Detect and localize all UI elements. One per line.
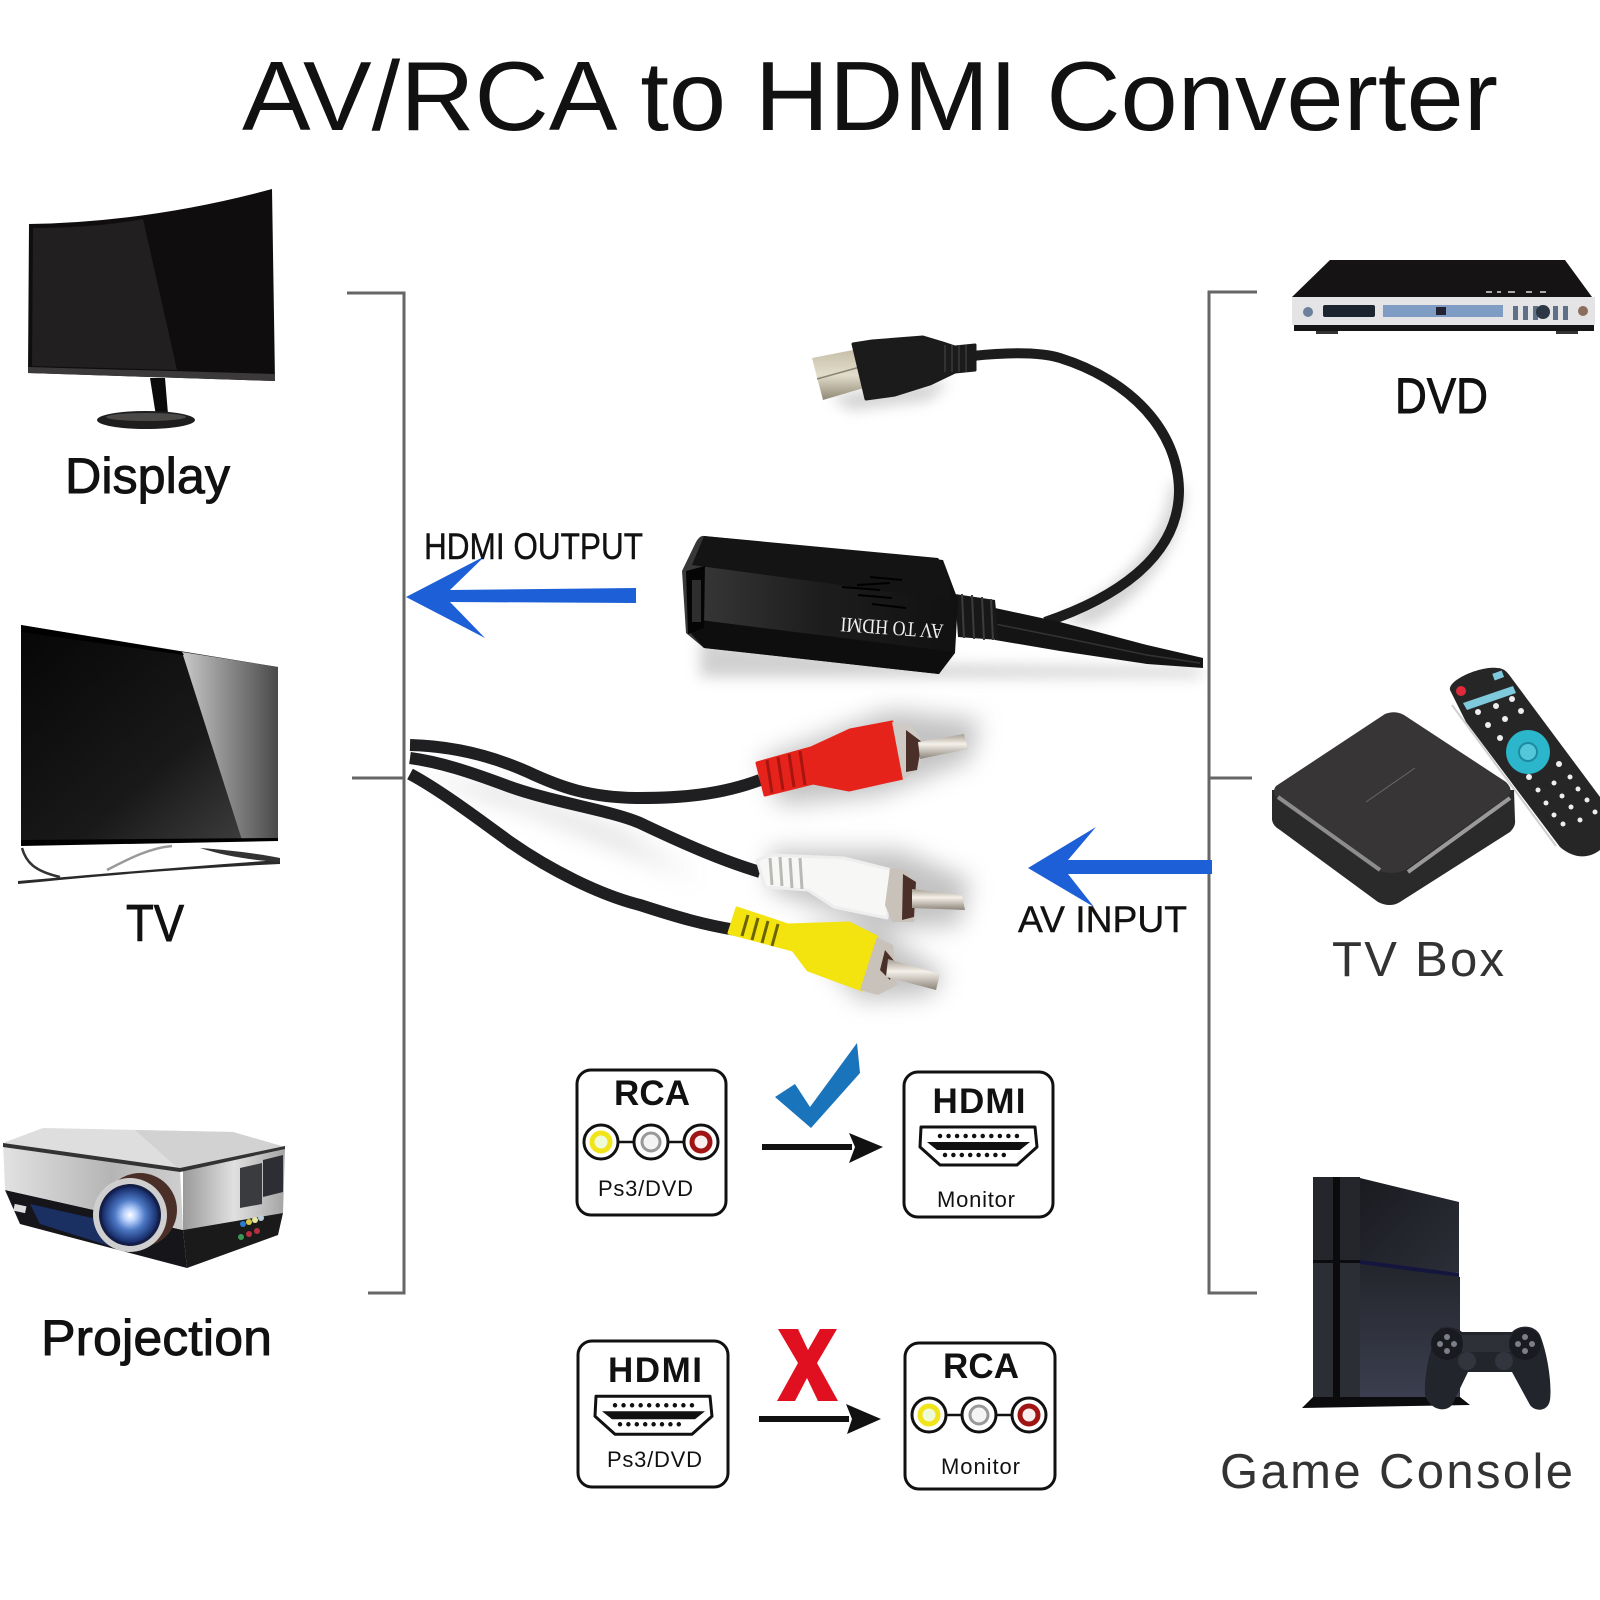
adapter printed label: AV TO HDMI bbox=[840, 612, 944, 644]
RCA monitor box: RCA bbox=[943, 1347, 1019, 1386]
RCA box: Ps3/DVD bbox=[598, 1176, 693, 1201]
box top bbox=[1274, 712, 1511, 873]
arrow: unsupported direction bbox=[759, 1404, 881, 1434]
red plug bbox=[757, 722, 968, 795]
icon: red X bbox=[777, 1329, 838, 1401]
adapter body bbox=[682, 536, 958, 674]
white plug bbox=[757, 855, 965, 922]
label: Projection: Projection bbox=[41, 1310, 272, 1366]
label: TV Box: TV Box bbox=[1332, 933, 1504, 987]
icon: TV box with remote bbox=[1272, 668, 1600, 905]
panel: RCA source to HDMI monitor (supported) bbox=[577, 1043, 1053, 1217]
remote control bbox=[1450, 668, 1600, 856]
USB cable bbox=[972, 353, 1179, 622]
yellow plug bbox=[729, 908, 940, 995]
HDMI monitor box: HDMI bbox=[932, 1082, 1026, 1121]
RCA cables and plugs bbox=[410, 710, 980, 1000]
flat cables bbox=[995, 608, 1203, 668]
RCA box bbox=[577, 1070, 726, 1215]
panel: HDMI source to RCA monitor (not supported) bbox=[578, 1329, 1055, 1489]
cables bbox=[410, 745, 760, 798]
RCA monitor box bbox=[905, 1343, 1055, 1489]
icon: flat TV bbox=[18, 625, 280, 884]
right bracket bbox=[1209, 292, 1257, 1293]
title: AV/RCA to HDMI Converter bbox=[242, 41, 1498, 151]
arrow: supported direction bbox=[762, 1133, 883, 1163]
label: Display: Display bbox=[65, 448, 230, 504]
HDMI monitor box: Monitor bbox=[937, 1187, 1015, 1212]
icon: projector bbox=[3, 1128, 285, 1268]
label: TV: TV bbox=[126, 895, 184, 953]
arrow: AV input bbox=[1028, 827, 1212, 907]
HDMI monitor box bbox=[904, 1072, 1053, 1217]
HDMI box: Ps3/DVD bbox=[607, 1447, 702, 1472]
box side bbox=[1272, 790, 1515, 905]
shadow under adapter bbox=[700, 380, 1200, 677]
converter adapter with USB cable bbox=[682, 337, 1203, 677]
USB body bbox=[853, 337, 975, 399]
label: Game Console: Game Console bbox=[1220, 1445, 1573, 1499]
label: HDMI OUTPUT: HDMI OUTPUT bbox=[424, 526, 643, 567]
label: DVD: DVD bbox=[1395, 368, 1488, 424]
console bbox=[1302, 1177, 1470, 1408]
left bracket bbox=[347, 293, 404, 1293]
label: AV INPUT: AV INPUT bbox=[1018, 899, 1187, 940]
RCA monitor box: Monitor bbox=[941, 1454, 1020, 1479]
icon: curved display monitor bbox=[28, 189, 275, 429]
HDMI box bbox=[578, 1341, 728, 1487]
arrow: HDMI output bbox=[406, 556, 636, 638]
plug shadows bbox=[420, 710, 980, 1000]
RCA box: RCA bbox=[614, 1074, 690, 1113]
strain relief bbox=[955, 594, 999, 640]
icon: blue check mark bbox=[775, 1043, 860, 1128]
icon: DVD player bbox=[1292, 260, 1595, 334]
controller bbox=[1425, 1327, 1551, 1410]
icon: game console with controller bbox=[1302, 1177, 1551, 1410]
HDMI box: HDMI bbox=[608, 1351, 702, 1390]
USB metal plug bbox=[812, 350, 867, 400]
